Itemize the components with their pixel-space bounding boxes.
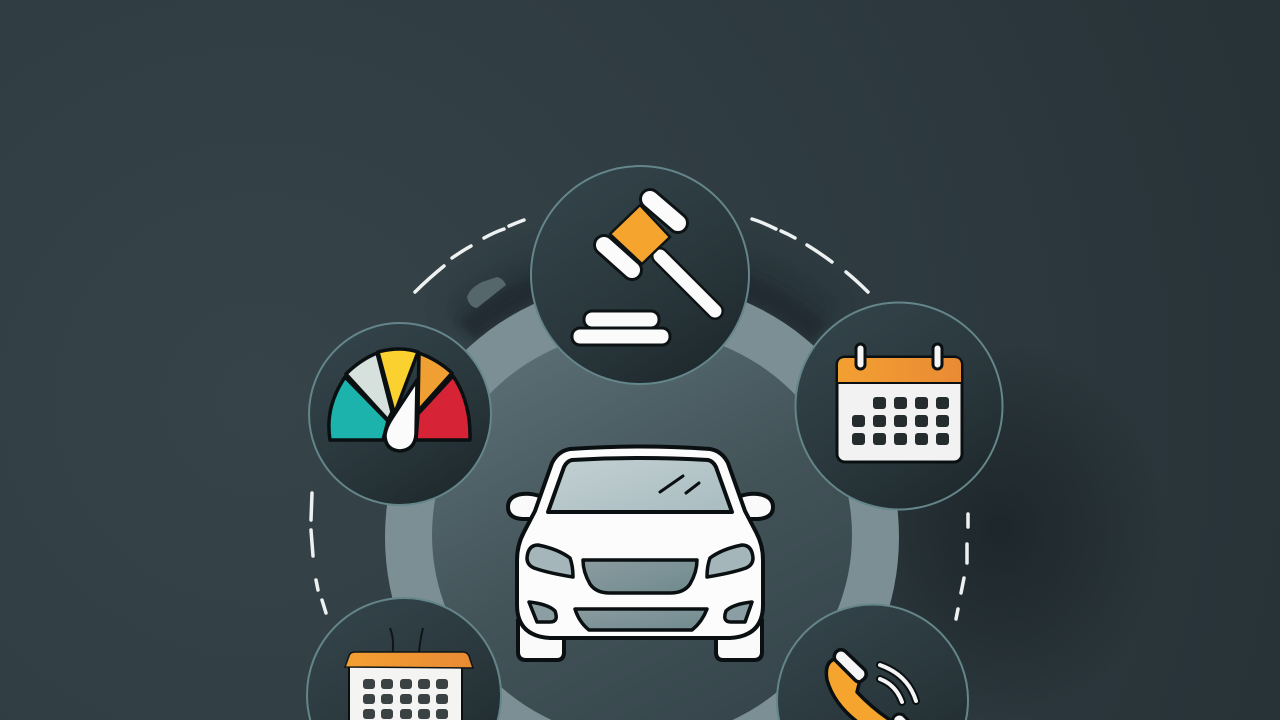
node: gauge — [309, 323, 491, 505]
gavel handle — [660, 256, 715, 311]
calendar page — [837, 357, 962, 462]
node: calendar lower left — [307, 598, 501, 720]
headlights — [527, 545, 753, 577]
calendar header — [345, 652, 473, 668]
wiper marks — [660, 476, 699, 493]
fog lamps — [529, 602, 752, 622]
shadow cast to the lower right — [835, 340, 1165, 720]
calendar rings — [856, 344, 865, 369]
shadow band above the ring — [455, 249, 832, 333]
gavel base — [584, 311, 659, 328]
wheels — [518, 620, 762, 660]
central ring — [385, 280, 899, 720]
node: calendar upper right — [796, 302, 1002, 510]
node: phone — [777, 604, 968, 720]
windshield — [548, 458, 732, 512]
hanging marks — [390, 628, 423, 658]
phone handset — [826, 659, 894, 720]
mirrors — [508, 494, 773, 519]
knob on the ring shadow — [467, 277, 506, 308]
car — [508, 446, 773, 660]
phone earpiece — [834, 650, 866, 682]
car body — [517, 446, 763, 638]
calendar day cells — [852, 397, 949, 445]
central disk — [432, 330, 852, 720]
lower intake — [575, 609, 707, 630]
gavel head — [610, 205, 670, 264]
signal waves — [880, 665, 916, 701]
gauge needle — [385, 380, 417, 451]
dashed orbit segments — [311, 219, 968, 619]
calendar day cells — [363, 679, 448, 719]
grille — [583, 560, 697, 593]
calendar header — [837, 357, 962, 383]
node: gavel — [531, 166, 749, 384]
gauge segments — [329, 349, 470, 440]
calendar page — [349, 664, 462, 720]
